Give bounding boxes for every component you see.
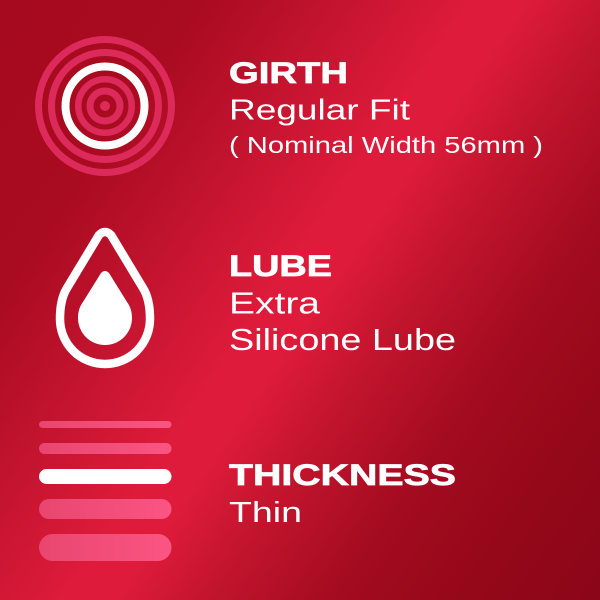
heading: thickness: THICKNESS [229, 459, 456, 492]
text: thin: Thin [229, 497, 302, 529]
text: regular fit: Regular Fit [229, 94, 410, 126]
text: extra: Extra [229, 286, 321, 320]
heading: girth: GIRTH [229, 57, 348, 90]
icon: girth concentric rings [38, 40, 172, 172]
heading: lube: LUBE [229, 250, 332, 283]
text block: lube [229, 250, 456, 357]
text: silicone lube: Silicone Lube [229, 322, 456, 357]
icon: thickness bars [39, 421, 172, 561]
text: nominal width: ( Nominal Width 56mm ) [229, 132, 543, 158]
icon: lube droplet [60, 232, 150, 364]
text block: thickness [229, 459, 456, 529]
text block: girth [229, 57, 543, 158]
